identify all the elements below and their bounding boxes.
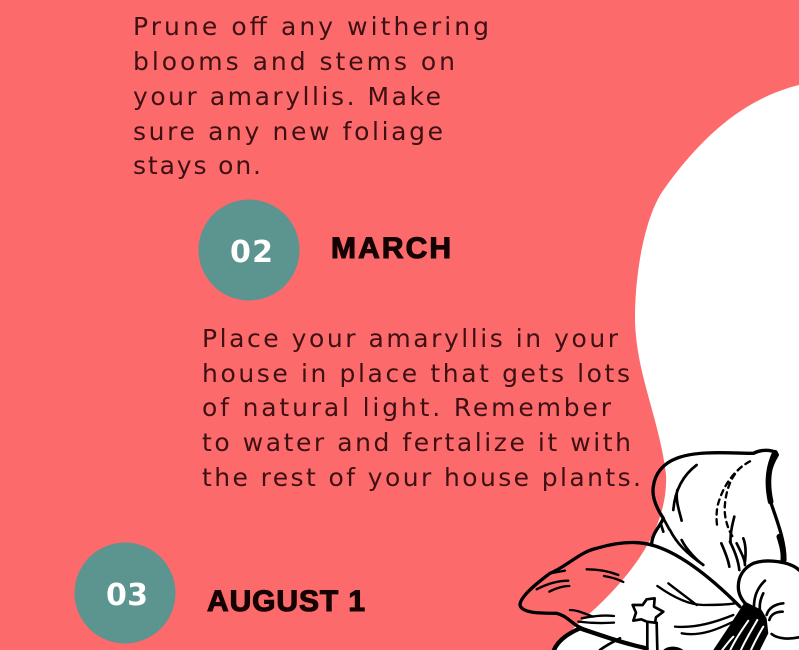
step 2 description: of natural light. Remember [202,393,612,422]
step 1 description: stays on. [133,151,261,180]
step 3 heading: AUGUST 1 [207,585,365,618]
step 1 description: sure any new foliage [133,117,443,146]
step 2 description: house in place that gets lots [202,359,630,388]
flower throat [713,602,768,650]
right petal [738,561,799,639]
step 3 number badge [74,542,176,644]
step 2 description: the rest of your house plants. [202,463,641,492]
step 2 number badge [198,200,300,300]
amaryllis flower illustration [520,450,799,650]
step 2 number badge: 02 [230,235,273,270]
stamen [600,598,683,650]
left petal [520,543,652,630]
step 1 description: Prune off any withering [133,12,489,41]
step 2 description: Place your amaryllis in your [202,324,619,353]
step 1 description [133,12,489,180]
upper petal [652,450,785,570]
step 2 description [202,324,641,492]
step 1 description: blooms and stems on [133,47,455,76]
step 1 description: your amaryllis. Make [133,82,441,111]
white organic blob [553,85,799,650]
step 2 description: to water and fertalize it with [202,428,631,457]
step 3 number badge: 03 [106,578,148,613]
centre petal [554,545,740,650]
step 2 heading: MARCH [331,232,451,265]
